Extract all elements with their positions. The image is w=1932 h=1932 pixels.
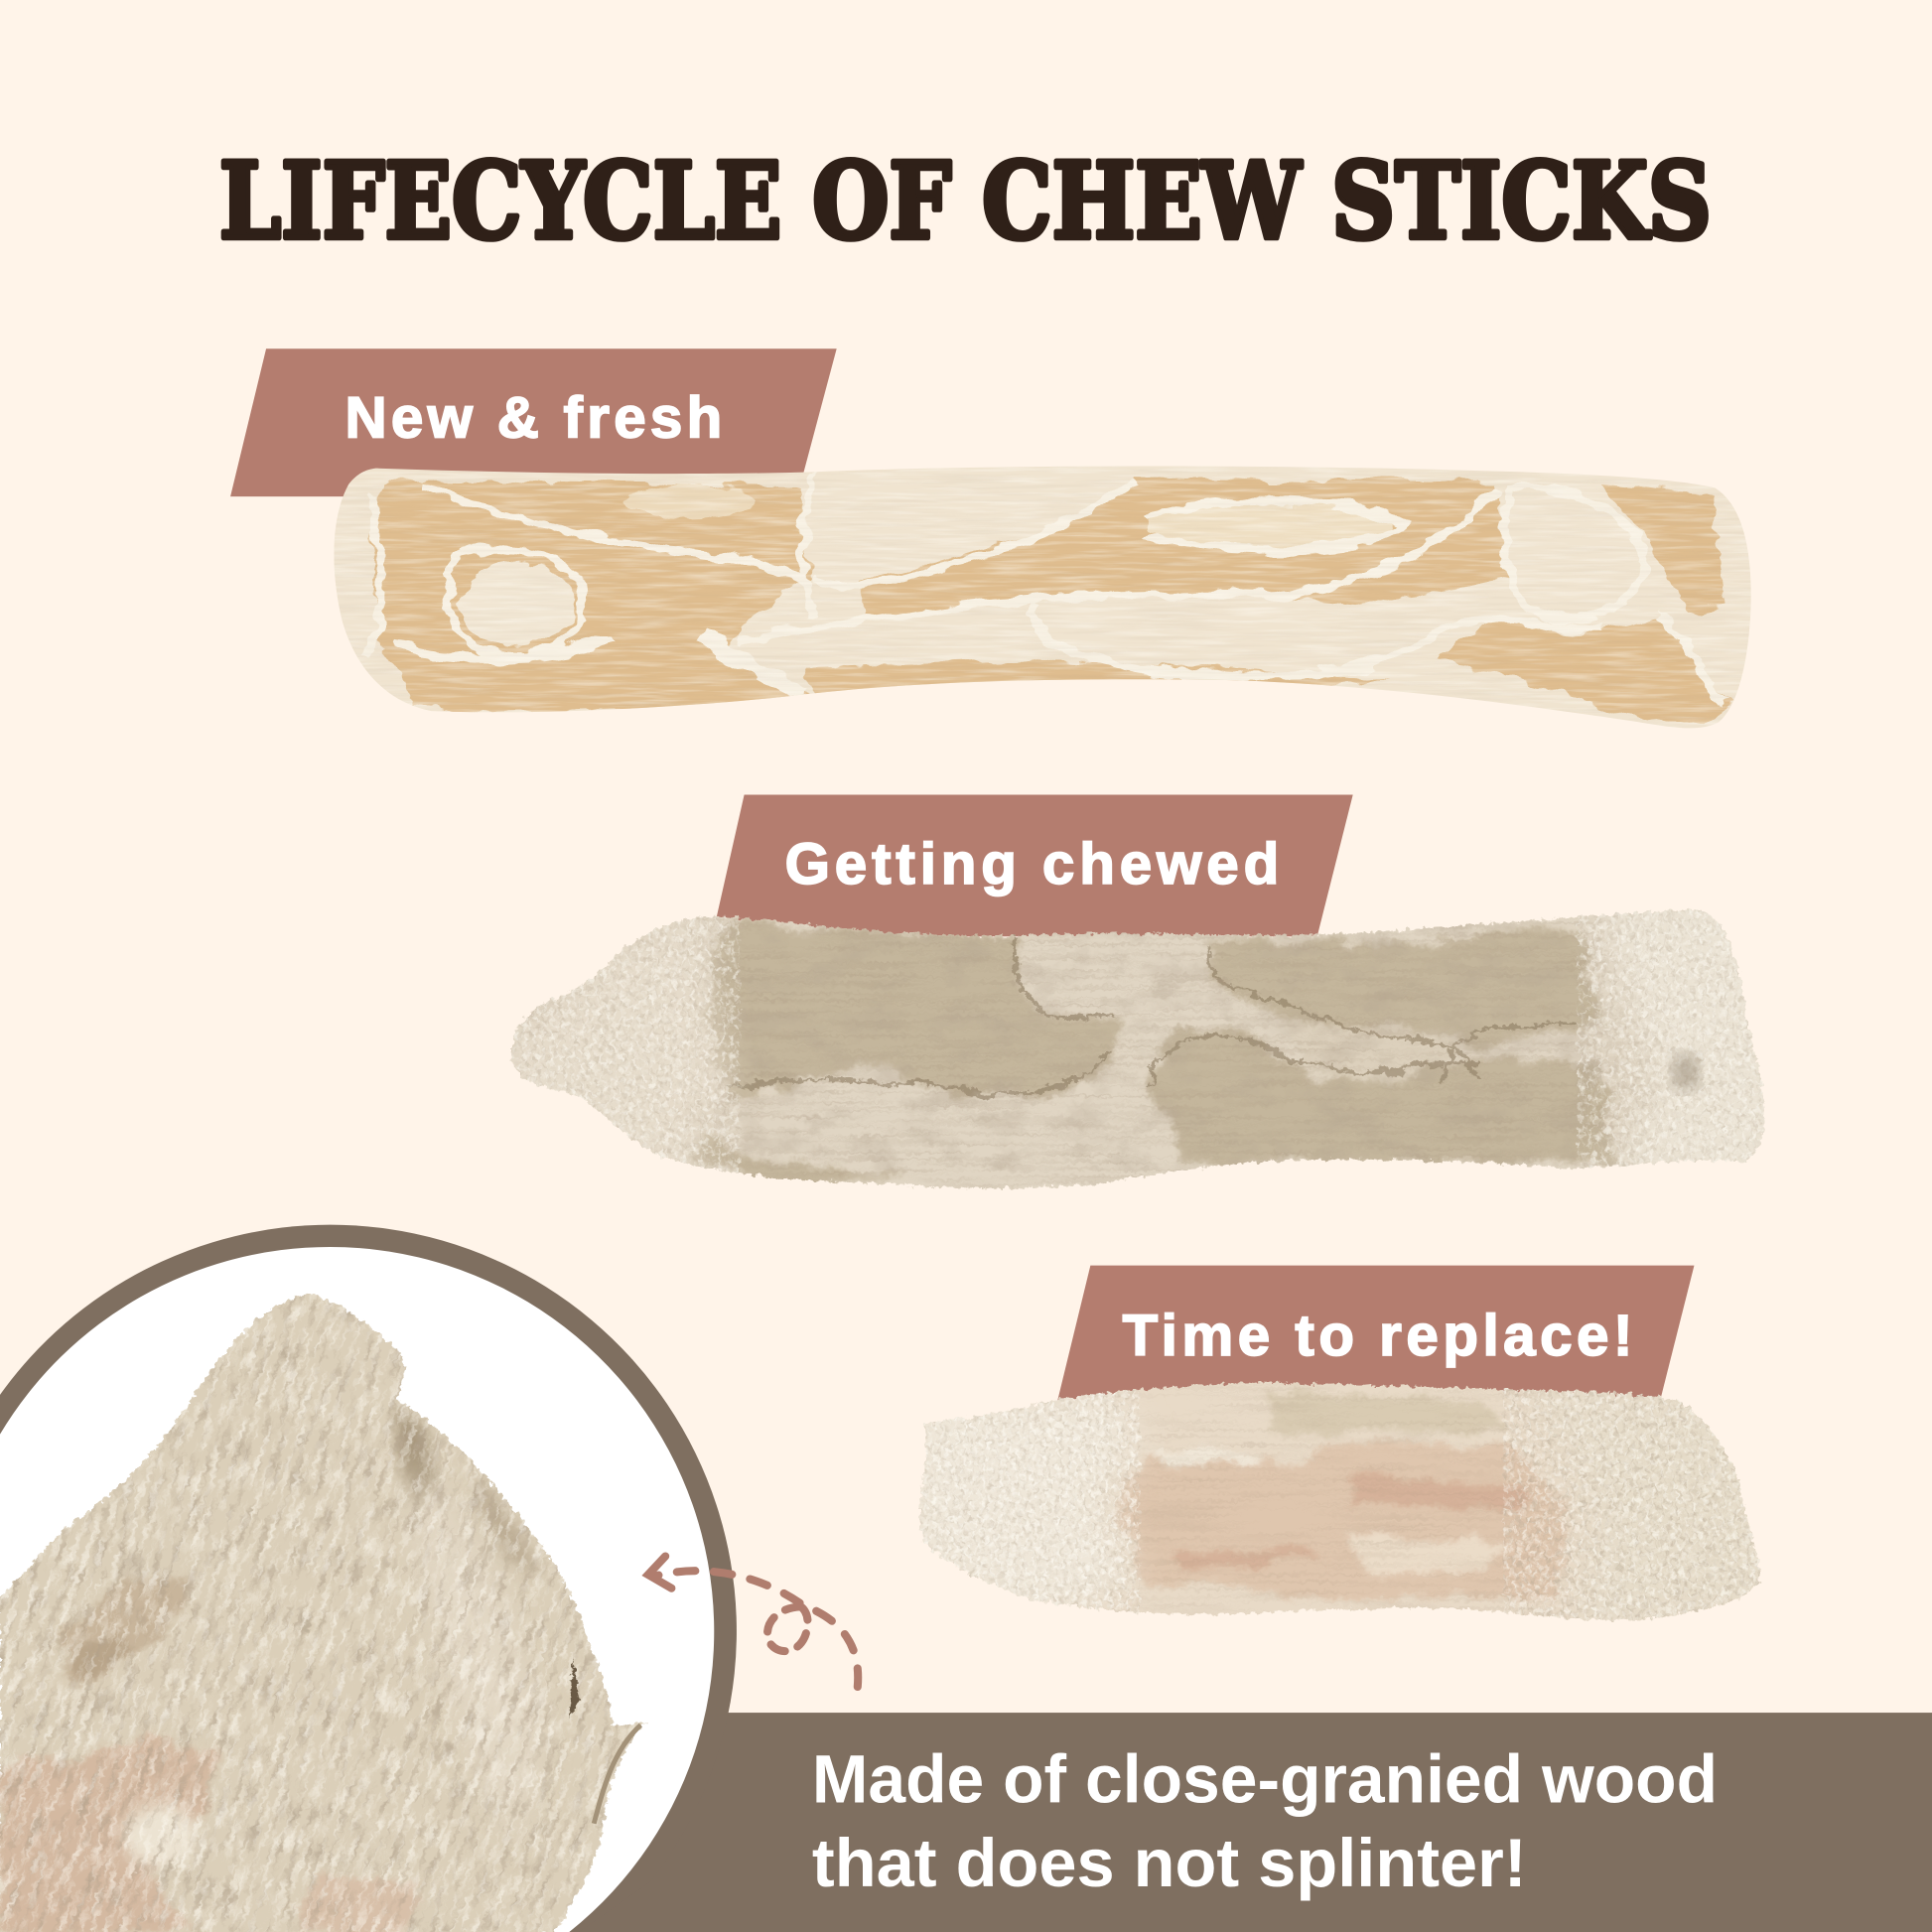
label: getting chewed	[712, 794, 1353, 936]
photo: worn out stick	[918, 1380, 1761, 1622]
callout text: that does not splinter!	[812, 1826, 1527, 1901]
label: getting chewed: Getting chewed	[785, 832, 1279, 897]
panel: getting chewed stage	[492, 794, 1787, 1195]
label: new and fresh: New & fresh	[345, 386, 722, 451]
circle frame	[0, 1225, 737, 1932]
label: time to replace	[1056, 1266, 1694, 1407]
label: new and fresh	[230, 348, 837, 496]
panel: new and fresh stage	[230, 348, 1762, 740]
callout text: Made of close-granied wood	[812, 1742, 1718, 1818]
banner: bottom callout background	[492, 1713, 1932, 1932]
panel: magnified detail circle	[0, 1225, 737, 1932]
callout text	[812, 1742, 1718, 1901]
photo: half chewed stick	[492, 894, 1787, 1195]
arrow: dashed loop pointing into circle	[648, 1556, 858, 1687]
circle interior	[0, 1247, 714, 1932]
frayed fibre sprig	[594, 1725, 640, 1824]
photo: close-up of frayed wood fibres	[0, 1282, 665, 1932]
panel: time to replace stage	[905, 1266, 1780, 1639]
label: time to replace: Time to replace!	[1123, 1304, 1632, 1368]
photo: new chew stick	[321, 456, 1762, 740]
